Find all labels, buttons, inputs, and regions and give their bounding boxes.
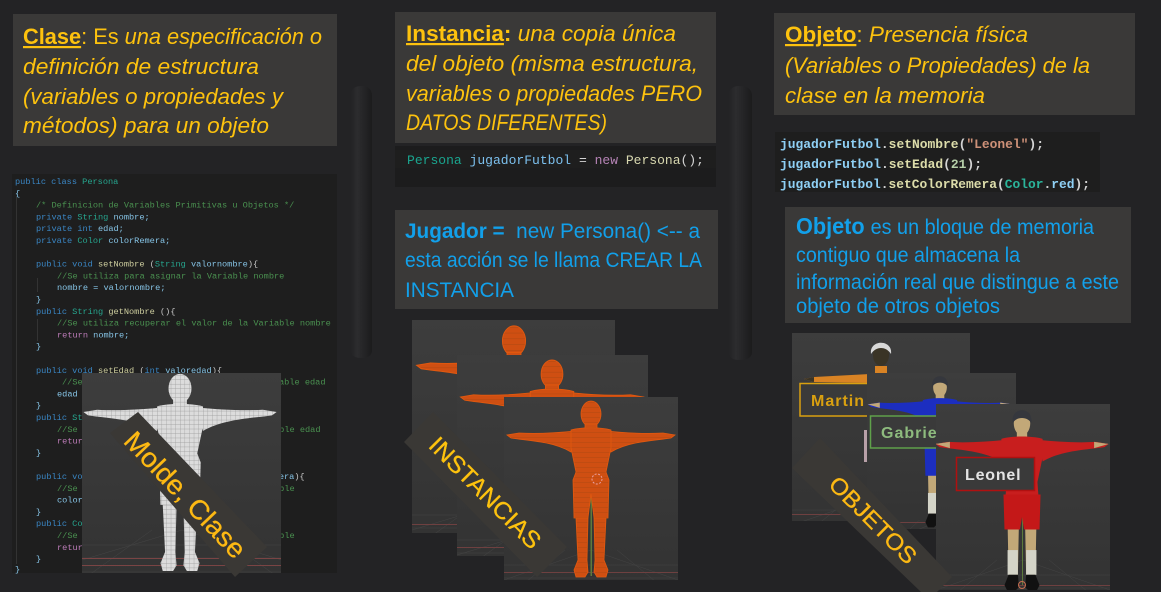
heading: instancia: DATOS DIFERENTES)	[406, 110, 607, 135]
heading: clase: Clase: Es una especificación o	[23, 24, 322, 49]
banner: instancias	[404, 412, 567, 577]
image: objeto gabriel	[867, 373, 1016, 529]
code: new Persona: Persona jugadorFutbol = new Persona();	[407, 153, 704, 168]
code listing: clase Persona: edad = valoredad;	[57, 389, 145, 399]
code listing: clase Persona: }	[36, 555, 41, 565]
code listing: clase Persona: return edad;	[57, 437, 119, 447]
heading: clase: métodos) para un objeto	[23, 113, 269, 138]
heading: instancia: Instancia: una copia única	[406, 21, 676, 46]
code listing: clase Persona: private Color colorRemera;	[36, 236, 170, 246]
panel: objeto	[774, 13, 1135, 592]
code listing: clase Persona: //Se utiliza recuperar el valor de la Variable edad	[57, 425, 320, 435]
divider left	[351, 86, 372, 358]
text box: jugador: esta acción se le llama CREAR LA	[405, 249, 702, 272]
code listing: clase Persona: {	[15, 189, 20, 199]
label: leonel: Leonel	[965, 467, 1021, 484]
code listing: clase Persona: /* Definicion de Variables Primitivas u Objetos */	[36, 201, 294, 211]
code listing: clase Persona: public void setNombre (String valornombre){	[36, 260, 258, 270]
banner: molde, clase: Molde, Clase	[118, 426, 252, 564]
code listing: clase Persona: public void setEdad (int valoredad){	[36, 366, 222, 376]
heading: objeto: (Variables o Propiedades) de la	[785, 53, 1090, 78]
panel: instancia	[395, 12, 718, 592]
code: new Persona	[395, 146, 716, 187]
code listing: clase Persona: public class Persona	[15, 177, 118, 187]
code: setters: jugadorFutbol.setNombre("Leonel");	[780, 138, 1044, 152]
text box: jugador: INSTANCIA	[405, 279, 514, 302]
divider right	[729, 86, 752, 360]
image: instancia 3	[504, 397, 678, 580]
banner: molde, clase	[110, 412, 267, 577]
code listing: clase Persona: }	[36, 401, 41, 411]
code listing: clase Persona: }	[36, 295, 41, 305]
code: setters: jugadorFutbol.setColorRemera(Color.red);	[780, 178, 1090, 192]
code listing: clase Persona: return nombre;	[57, 330, 129, 340]
code listing: clase Persona: }	[36, 507, 41, 517]
banner: instancias: INSTANCIAS	[423, 432, 546, 555]
heading: instancia	[395, 12, 716, 143]
code: setters	[775, 132, 1100, 192]
code: setters: jugadorFutbol.setEdad(21);	[780, 158, 982, 172]
label: martin: Martin	[811, 393, 865, 410]
code listing: clase Persona: public String	[36, 413, 103, 423]
code listing: clase Persona: private String nombre;	[36, 212, 150, 222]
code listing: clase Persona: public String getNombre (){	[36, 307, 176, 317]
code listing: clase Persona: private int edad;	[36, 224, 124, 234]
text box: objeto memoria: contiguo que almacena la	[796, 244, 1020, 267]
code listing: clase Persona: colorRemera = valorColorRemera;	[57, 496, 217, 506]
image: instancia 2	[457, 355, 648, 556]
heading: objeto	[774, 13, 1135, 115]
code listing: clase Persona: //Se utiliza para asignar la Variable nombre	[57, 271, 284, 281]
heading: instancia: del objeto (misma estructura,	[406, 51, 698, 76]
text box: objeto memoria	[785, 207, 1131, 323]
code listing: clase Persona: public Color	[36, 519, 98, 529]
code listing: clase Persona: }	[15, 565, 20, 575]
text box: objeto memoria: objeto de otros objetos	[796, 295, 1000, 318]
heading: clase: (variables o propiedades y	[23, 84, 285, 109]
text box: objeto memoria: información real que distingue a este	[796, 271, 1119, 294]
code listing: clase Persona: }	[36, 448, 41, 458]
code listing: clase Persona: public void setColorRemera (Color valorColorRemera){	[36, 472, 305, 482]
code listing: clase Persona	[12, 174, 337, 575]
heading: objeto: Objeto: Presencia física	[785, 22, 1028, 47]
image: molde wireframe	[82, 373, 281, 573]
code listing: clase Persona: //Se utiliza recuperar el valor de la Variable	[57, 484, 295, 494]
banner: objetos: OBJETOS	[824, 471, 922, 569]
image: instancia 1	[412, 320, 615, 533]
label: gabriel: Gabriel	[881, 425, 943, 442]
code listing: clase Persona: //Se utiliza recuperar el valor de la Variable nombre	[57, 319, 331, 329]
image: objeto leonel	[936, 404, 1110, 590]
heading: clase	[13, 14, 337, 146]
banner: objetos	[792, 438, 952, 592]
text box: objeto memoria: Objeto es un bloque de memoria	[796, 213, 1094, 239]
label: leonel	[956, 458, 1034, 490]
code listing: clase Persona: }	[36, 342, 41, 352]
heading: instancia: variables o propiedades PERO	[406, 81, 702, 106]
panel: clase	[12, 14, 337, 580]
text box: jugador: Jugador = new Persona() <-- a	[405, 220, 700, 243]
code listing: clase Persona: nombre = valornombre;	[57, 283, 166, 293]
code listing: clase Persona: return colorRemera;	[57, 543, 155, 553]
image: objeto martin	[792, 333, 970, 521]
code listing: clase Persona: //Se utiliza recuperar el valor de la Variable	[57, 531, 295, 541]
heading: objeto: clase en la memoria	[785, 83, 985, 108]
code listing: clase Persona: //Se utiliza recuperar el valor de la Variable edad	[62, 378, 326, 388]
label: gabriel	[870, 416, 946, 448]
label: martin	[800, 384, 875, 416]
text box: jugador	[395, 210, 718, 309]
heading: clase: definición de estructura	[23, 54, 259, 79]
